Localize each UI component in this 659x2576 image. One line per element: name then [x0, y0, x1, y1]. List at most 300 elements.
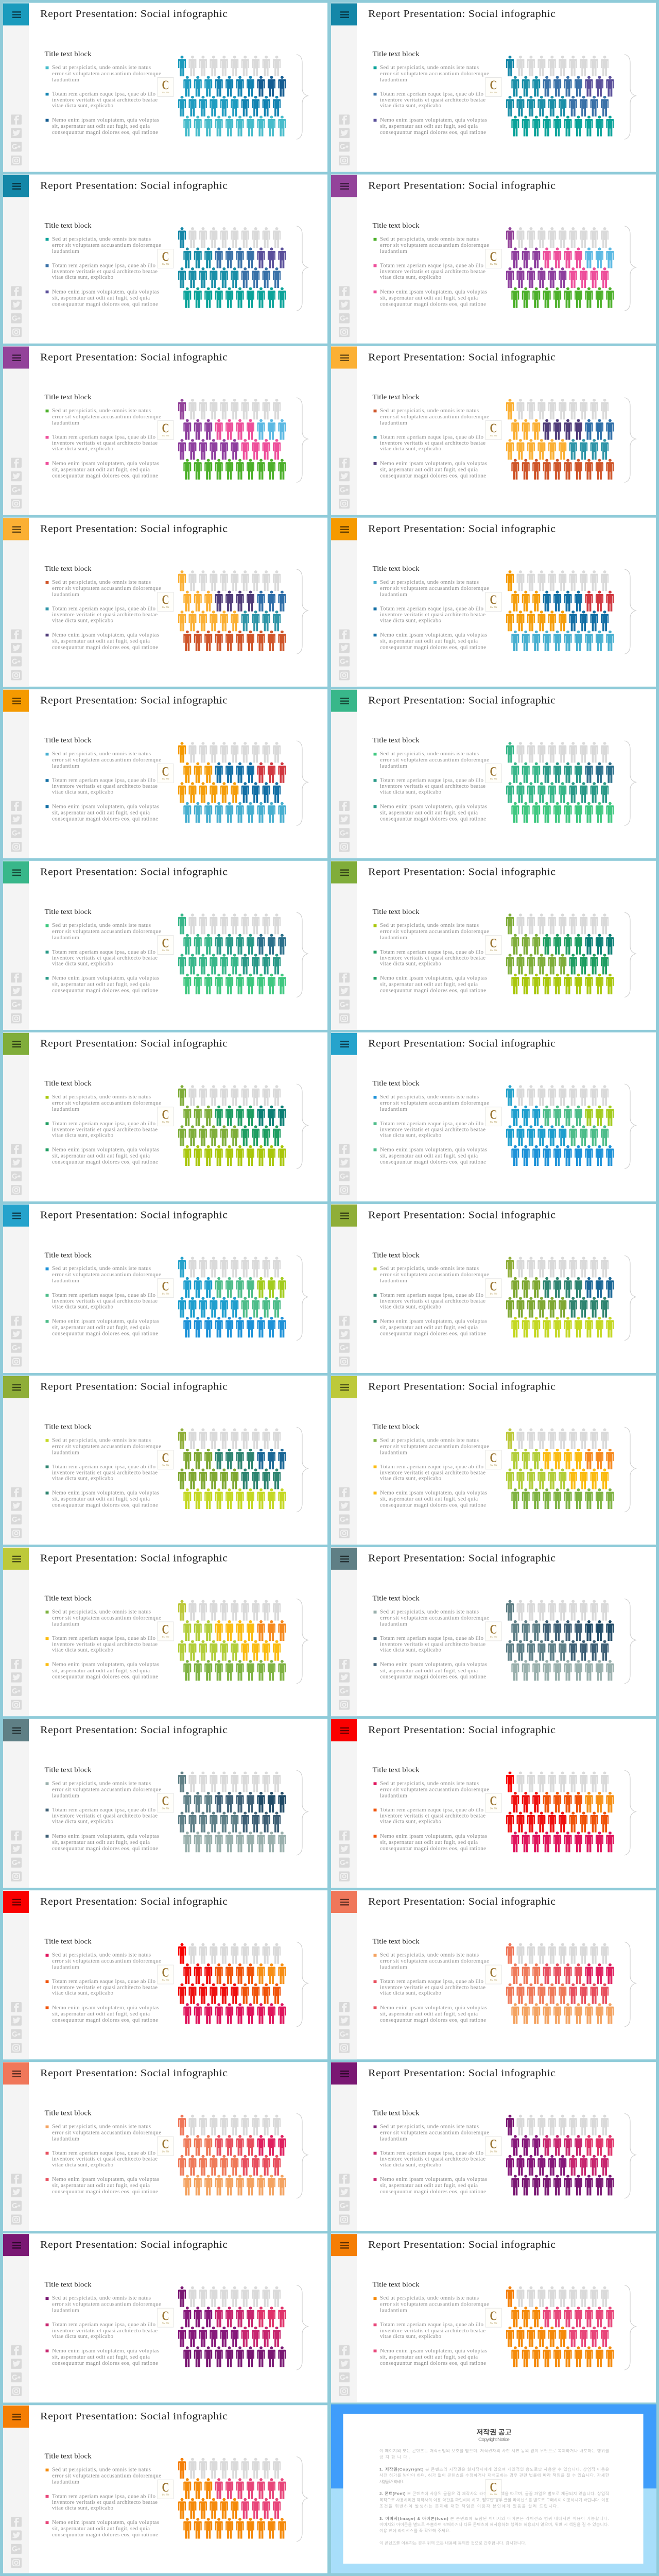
slide panel: row 6 left: [3, 861, 327, 1030]
sidebar: [331, 1032, 357, 1201]
text item 2: inventore veritatis et quasi architecto beatae: [380, 440, 485, 446]
text item 1: [374, 1781, 489, 1799]
block heading: Title text block: [44, 1080, 92, 1088]
text item 1: [374, 408, 489, 426]
text item 1: Sed ut perspiciatis, unde omnis iste natus: [52, 1094, 151, 1100]
social icons: [11, 1316, 22, 1367]
text item 3: consequuntur magni dolores eos, qui ratione: [380, 988, 486, 993]
slide panel: row 3 right: [331, 346, 656, 515]
social icons: [339, 1659, 350, 1710]
text item 3: sit, aspernatur aut odit aut fugit, sed quia: [380, 1154, 478, 1159]
text item 3: sit, aspernatur aut odit aut fugit, sed quia: [52, 2183, 150, 2189]
text item 1: error sit voluptatem accusantium doloremque: [380, 1959, 489, 1964]
text item 1: Sed ut perspiciatis, unde omnis iste natus: [52, 236, 151, 242]
text item 3: consequuntur magni dolores eos, qui ratione: [380, 2361, 486, 2366]
watermark: C: [490, 764, 497, 778]
people chart: [506, 1085, 614, 1166]
text item 3: consequuntur magni dolores eos, qui ratione: [380, 2018, 486, 2023]
card background: [331, 1547, 656, 1716]
text item 1: error sit voluptatem accusantium doloremque: [380, 1100, 489, 1106]
text item 2: vitae dicta sunt, explicabo: [52, 1819, 113, 1825]
notice closing line: 이 콘텐츠를 이용하는 경우 위의 모든 내용에 동의한 것으로 간주합니다. 감사합니다.: [379, 2540, 526, 2546]
block heading: Title text block: [372, 908, 420, 916]
watermark: [158, 2137, 174, 2156]
text item 3: consequuntur magni dolores eos, qui ratione: [52, 1846, 158, 1852]
text item 2: inventore veritatis et quasi architecto beatae: [52, 1299, 158, 1304]
title: Report Presentation: Social infographic: [40, 1895, 228, 1907]
text item 1: error sit voluptatem accusantium doloremque: [380, 71, 489, 77]
title: Report Presentation: Social infographic: [40, 694, 228, 706]
social icons: [339, 114, 350, 165]
text item 2: inventore veritatis et quasi architecto beatae: [52, 1642, 158, 1647]
text item 2: vitae dicta sunt, explicabo: [52, 275, 113, 280]
social icons: [339, 1831, 350, 1882]
text item 1: error sit voluptatem accusantium doloremque: [52, 414, 161, 420]
text item 2: vitae dicta sunt, explicabo: [52, 1133, 113, 1138]
social icons: [11, 2002, 22, 2053]
social icons: [339, 630, 350, 680]
text item 1: [45, 2467, 161, 2485]
menu button: [331, 2062, 357, 2084]
text item 3: [45, 1490, 159, 1509]
text item 3: [374, 1834, 487, 1852]
text item 1: Sed ut perspiciatis, unde omnis iste natus: [380, 1609, 479, 1615]
brace: [297, 741, 308, 826]
card background: [331, 2233, 656, 2402]
watermark: SM TN: [162, 1636, 169, 1638]
text item 2: [374, 263, 485, 280]
block heading: Title text block: [44, 737, 92, 744]
menu button: [331, 1205, 357, 1227]
brace: [297, 398, 308, 483]
watermark: [485, 2308, 501, 2327]
text item 1: laudantium: [52, 2137, 80, 2142]
text item 2: [45, 1293, 158, 1310]
text item 3: [374, 1147, 487, 1165]
text item 2: Totam rem aperiam eaque ipsa, quae ab illo: [380, 778, 483, 784]
notice paragraph 2: 사전 허가를 받아야 하며, 허가 없이 콘텐츠를 수정하거나 재배포하는 경우 관련 법률에 따라 책임을 질 수 있습니다. 자세한: [379, 2472, 609, 2478]
slide panel: row 2 right: [331, 175, 656, 344]
text item 3: Nemo enim ipsam voluptatem, quia voluptas: [52, 976, 159, 981]
menu button: [331, 518, 357, 540]
text item 1: Sed ut perspiciatis, unde omnis iste natus: [52, 1266, 151, 1272]
block heading: Title text block: [44, 2281, 92, 2289]
watermark: SM TN: [490, 2150, 497, 2153]
text item 3: sit, aspernatur aut odit aut fugit, sed quia: [52, 1325, 150, 1331]
watermark: C: [162, 935, 169, 950]
text item 2: Totam rem aperiam eaque ipsa, quae ab illo: [52, 435, 155, 440]
text item 3: [45, 633, 159, 650]
people chart: [506, 742, 614, 823]
people chart: [178, 56, 286, 137]
slide panel: row 12 right: [331, 1890, 656, 2059]
menu button: [3, 175, 29, 197]
text item 2: Totam rem aperiam eaque ipsa, quae ab illo: [380, 263, 483, 268]
text item 3: sit, aspernatur aut odit aut fugit, sed quia: [380, 1668, 478, 1674]
people chart: [506, 2286, 614, 2367]
people chart: [178, 570, 286, 651]
text item 3: [45, 461, 159, 479]
text item 3: [45, 2177, 159, 2195]
watermark: [158, 1278, 174, 1298]
slide panel: row 9 right: [331, 1376, 656, 1545]
notice paragraph 4: [379, 2516, 609, 2533]
watermark: SM TN: [490, 2322, 497, 2325]
text item 3: Nemo enim ipsam voluptatem, quia voluptas: [380, 1834, 487, 1839]
text item 1: [45, 1609, 161, 1627]
text item 2: Totam rem aperiam eaque ipsa, quae ab illo: [52, 1464, 155, 1470]
text item 2: [374, 1121, 485, 1138]
text item 3: [45, 118, 159, 135]
text item 1: error sit voluptatem accusantium doloremque: [380, 414, 489, 420]
text item 1: laudantium: [52, 1279, 80, 1284]
people chart: [178, 1428, 286, 1509]
card background: [3, 175, 327, 344]
text item 1: [374, 65, 489, 83]
text item 2: [45, 92, 158, 109]
people chart: [506, 56, 614, 137]
watermark: C: [490, 592, 497, 607]
people chart: [506, 913, 614, 994]
text item 1: error sit voluptatem accusantium doloremque: [52, 1787, 161, 1792]
text item 1: error sit voluptatem accusantium doloremque: [52, 929, 161, 935]
watermark: SM TN: [490, 1292, 497, 1295]
text item 1: [374, 1609, 489, 1627]
text item 3: consequuntur magni dolores eos, qui ratione: [380, 1331, 486, 1337]
sidebar: [331, 1890, 357, 2059]
text item 1: Sed ut perspiciatis, unde omnis iste natus: [380, 408, 479, 414]
watermark: C: [490, 1278, 497, 1293]
watermark: C: [490, 1622, 497, 1636]
text item 2: vitae dicta sunt, explicabo: [380, 447, 441, 452]
text item 2: [45, 778, 158, 795]
watermark: C: [162, 1965, 169, 1979]
text item 1: error sit voluptatem accusantium doloremque: [52, 243, 161, 248]
notice paragraph 2: 사항을 확인하세요.: [379, 2479, 404, 2484]
title: Report Presentation: Social infographic: [40, 1037, 228, 1049]
menu button: [3, 2405, 29, 2428]
text item 3: Nemo enim ipsam voluptatem, quia voluptas: [380, 461, 487, 466]
watermark: [485, 1450, 501, 1469]
sidebar: [3, 1204, 29, 1373]
text item 2: [374, 92, 485, 109]
text item 1: Sed ut perspiciatis, unde omnis iste natus: [380, 2296, 479, 2301]
notice subheading: Copyright Notice: [478, 2437, 510, 2443]
slide panel: row 14 left: [3, 2233, 327, 2402]
watermark: C: [162, 2137, 169, 2151]
social icons: [11, 801, 22, 852]
text item 3: [45, 1834, 159, 1852]
text item 2: vitae dicta sunt, explicabo: [52, 1648, 113, 1653]
block heading: Title text block: [44, 1251, 92, 1259]
text item 3: sit, aspernatur aut odit aut fugit, sed quia: [52, 982, 150, 987]
text item 3: sit, aspernatur aut odit aut fugit, sed quia: [380, 982, 478, 987]
sidebar: [3, 861, 29, 1030]
brace: [625, 226, 636, 311]
text item 2: [374, 435, 485, 452]
sidebar: [331, 2233, 357, 2402]
slide panel: row 15 left: [3, 2405, 327, 2573]
text item 1: error sit voluptatem accusantium doloremque: [380, 2130, 489, 2136]
text item 3: consequuntur magni dolores eos, qui ratione: [380, 473, 486, 479]
text item 3: Nemo enim ipsam voluptatem, quia voluptas: [52, 1147, 159, 1153]
text item 1: [45, 751, 161, 769]
sidebar: [3, 1376, 29, 1545]
text item 2: [45, 1979, 158, 1996]
text item 3: consequuntur magni dolores eos, qui ratione: [380, 302, 486, 307]
text item 2: inventore veritatis et quasi architecto beatae: [52, 2328, 158, 2334]
watermark: [158, 1793, 174, 1812]
watermark: [485, 1793, 501, 1812]
text item 2: [45, 1636, 158, 1653]
text item 1: [374, 751, 489, 769]
title: Report Presentation: Social infographic: [368, 1037, 556, 1049]
text item 1: Sed ut perspiciatis, unde omnis iste natus: [52, 1609, 151, 1615]
text item 2: vitae dicta sunt, explicabo: [380, 961, 441, 967]
text item 1: [45, 1094, 161, 1112]
menu button: [331, 3, 357, 25]
text item 3: consequuntur magni dolores eos, qui ratione: [380, 1160, 486, 1165]
watermark: [485, 1107, 501, 1126]
brace: [297, 912, 308, 997]
watermark: SM TN: [490, 1121, 497, 1123]
sidebar: [331, 1547, 357, 1716]
brace: [297, 1256, 308, 1341]
text item 2: Totam rem aperiam eaque ipsa, quae ab illo: [52, 1807, 155, 1813]
title: Report Presentation: Social infographic: [40, 351, 228, 363]
text item 1: error sit voluptatem accusantium doloremque: [52, 586, 161, 591]
brace: [297, 1942, 308, 2027]
text item 3: [374, 290, 487, 307]
text item 2: inventore veritatis et quasi architecto beatae: [52, 269, 158, 275]
people chart: [506, 1428, 614, 1509]
slide panel: row 2 left: [3, 175, 327, 344]
menu button: [3, 1548, 29, 1570]
brace: [625, 1256, 636, 1341]
text item 2: [374, 606, 485, 623]
text item 2: Totam rem aperiam eaque ipsa, quae ab illo: [52, 606, 155, 612]
title: Report Presentation: Social infographic: [368, 1380, 556, 1392]
text item 3: consequuntur magni dolores eos, qui ratione: [380, 130, 486, 135]
social icons: [339, 2002, 350, 2053]
text item 2: vitae dicta sunt, explicabo: [52, 961, 113, 967]
card background: [3, 1376, 327, 1545]
block heading: Title text block: [372, 737, 420, 744]
sidebar: [3, 1032, 29, 1201]
text item 1: laudantium: [380, 1279, 408, 1284]
social icons: [339, 1487, 350, 1538]
notice paragraph 2: 1. 저작권(Copyright) 본 콘텐츠의 저작권은 원저작자에게 있으며 개인적인 용도로만 사용할 수 있습니다. 상업적 이용은: [379, 2467, 609, 2472]
text item 2: [374, 1636, 485, 1653]
watermark: SM TN: [162, 263, 169, 265]
text item 1: [374, 236, 489, 255]
text item 1: Sed ut perspiciatis, unde omnis iste natus: [52, 2124, 151, 2129]
slide panel: row 6 right: [331, 861, 656, 1030]
notice heading: 저작권 공고: [476, 2429, 512, 2436]
watermark: C: [162, 2480, 169, 2495]
block heading: Title text block: [372, 1251, 420, 1259]
text item 3: [45, 2348, 159, 2366]
text item 1: laudantium: [52, 420, 80, 426]
text item 1: laudantium: [380, 1622, 408, 1627]
text item 2: Totam rem aperiam eaque ipsa, quae ab illo: [52, 1636, 155, 1641]
title: Report Presentation: Social infographic: [368, 179, 556, 191]
text item 3: Nemo enim ipsam voluptatem, quia voluptas: [52, 2348, 159, 2354]
card background: [3, 2233, 327, 2402]
watermark: SM TN: [162, 1464, 169, 1466]
text item 1: laudantium: [52, 935, 80, 941]
card background: [331, 518, 656, 687]
text item 3: sit, aspernatur aut odit aut fugit, sed quia: [52, 2354, 150, 2360]
text item 1: Sed ut perspiciatis, unde omnis iste natus: [380, 580, 479, 585]
text item 3: Nemo enim ipsam voluptatem, quia voluptas: [380, 1147, 487, 1153]
text item 3: [374, 1319, 487, 1337]
block heading: Title text block: [44, 1938, 92, 1945]
text item 3: consequuntur magni dolores eos, qui ratione: [52, 645, 158, 650]
text item 2: Totam rem aperiam eaque ipsa, quae ab illo: [52, 1121, 155, 1127]
card background: [331, 1719, 656, 1888]
sidebar: [3, 518, 29, 687]
text item 2: vitae dicta sunt, explicabo: [380, 1304, 441, 1310]
card background: [3, 3, 327, 172]
watermark: [485, 764, 501, 783]
title: Report Presentation: Social infographic: [40, 2410, 228, 2422]
sidebar: [3, 2062, 29, 2231]
card background: [331, 1204, 656, 1373]
brace: [297, 1427, 308, 1512]
watermark: C: [162, 420, 169, 435]
text item 2: vitae dicta sunt, explicabo: [380, 275, 441, 280]
text item 3: [374, 461, 487, 479]
text item 3: Nemo enim ipsam voluptatem, quia voluptas: [52, 118, 159, 123]
social icons: [339, 801, 350, 852]
text item 1: Sed ut perspiciatis, unde omnis iste natus: [380, 1953, 479, 1958]
text item 2: [374, 1979, 485, 1996]
people chart: [506, 570, 614, 651]
people chart: [506, 1943, 614, 2024]
text item 2: inventore veritatis et quasi architecto beatae: [380, 269, 485, 275]
text item 1: Sed ut perspiciatis, unde omnis iste natus: [380, 65, 479, 71]
sidebar: [3, 175, 29, 344]
text item 1: Sed ut perspiciatis, unde omnis iste natus: [380, 1781, 479, 1786]
text item 3: consequuntur magni dolores eos, qui ratione: [380, 1674, 486, 1680]
text item 1: error sit voluptatem accusantium doloremque: [380, 757, 489, 763]
watermark: C: [162, 1107, 169, 1122]
watermark: SM TN: [162, 1121, 169, 1123]
notice background: light blue band: [331, 2488, 656, 2573]
title: Report Presentation: Social infographic: [40, 2239, 228, 2250]
text item 1: error sit voluptatem accusantium doloremque: [52, 71, 161, 77]
title: Report Presentation: Social infographic: [368, 1209, 556, 1221]
text item 3: Nemo enim ipsam voluptatem, quia voluptas: [380, 804, 487, 809]
card background: [3, 346, 327, 515]
brace: [625, 1770, 636, 1855]
text item 2: inventore veritatis et quasi architecto beatae: [380, 613, 485, 618]
watermark: [158, 2480, 174, 2499]
text item 2: vitae dicta sunt, explicabo: [380, 103, 441, 109]
text item 1: Sed ut perspiciatis, unde omnis iste natus: [380, 1094, 479, 1100]
text item 1: [374, 580, 489, 598]
text item 3: sit, aspernatur aut odit aut fugit, sed quia: [380, 296, 478, 301]
people chart: [178, 2286, 286, 2367]
watermark: SM TN: [162, 777, 169, 780]
text item 2: inventore veritatis et quasi architecto beatae: [380, 2157, 485, 2162]
text item 3: Nemo enim ipsam voluptatem, quia voluptas: [380, 2348, 487, 2354]
text item 2: inventore veritatis et quasi architecto beatae: [380, 97, 485, 103]
title: Report Presentation: Social infographic: [368, 1895, 556, 1907]
text item 3: sit, aspernatur aut odit aut fugit, sed quia: [380, 2354, 478, 2360]
sidebar: [3, 3, 29, 172]
text item 2: inventore veritatis et quasi architecto beatae: [380, 784, 485, 789]
people chart: [506, 1257, 614, 1337]
menu button: [331, 861, 357, 884]
watermark: [485, 420, 501, 439]
text item 2: Totam rem aperiam eaque ipsa, quae ab illo: [380, 1464, 483, 1470]
card background: [3, 689, 327, 858]
text item 2: vitae dicta sunt, explicabo: [52, 790, 113, 795]
people chart: [506, 1772, 614, 1852]
text item 1: error sit voluptatem accusantium doloremque: [52, 1616, 161, 1621]
text item 3: Nemo enim ipsam voluptatem, quia voluptas: [380, 1319, 487, 1325]
watermark: [485, 1622, 501, 1641]
text item 1: error sit voluptatem accusantium doloremque: [52, 1444, 161, 1449]
slide panel: row 10 right: [331, 1547, 656, 1716]
watermark: SM TN: [490, 91, 497, 94]
menu button: [3, 1891, 29, 1913]
text item 2: Totam rem aperiam eaque ipsa, quae ab illo: [380, 1979, 483, 1985]
title: Report Presentation: Social infographic: [368, 2239, 556, 2250]
text item 2: [374, 1807, 485, 1825]
text item 3: consequuntur magni dolores eos, qui ratione: [380, 2189, 486, 2195]
menu button: [331, 1376, 357, 1398]
text item 2: inventore veritatis et quasi architecto beatae: [52, 956, 158, 961]
title: Report Presentation: Social infographic: [368, 2067, 556, 2079]
text item 1: Sed ut perspiciatis, unde omnis iste natus: [380, 923, 479, 928]
text item 2: Totam rem aperiam eaque ipsa, quae ab illo: [52, 2150, 155, 2156]
watermark: SM TN: [490, 1979, 497, 1981]
text item 1: laudantium: [380, 2308, 408, 2313]
watermark: [158, 1965, 174, 1984]
text item 3: Nemo enim ipsam voluptatem, quia voluptas: [380, 2177, 487, 2182]
text item 2: inventore veritatis et quasi architecto beatae: [52, 97, 158, 103]
text item 2: vitae dicta sunt, explicabo: [380, 1819, 441, 1825]
text item 2: Totam rem aperiam eaque ipsa, quae ab illo: [52, 2494, 155, 2499]
watermark: [485, 2137, 501, 2156]
social icons: [11, 973, 22, 1023]
text item 2: Totam rem aperiam eaque ipsa, quae ab illo: [380, 950, 483, 955]
text item 2: vitae dicta sunt, explicabo: [52, 2505, 113, 2511]
text item 1: laudantium: [380, 592, 408, 598]
text item 1: Sed ut perspiciatis, unde omnis iste natus: [52, 1953, 151, 1958]
text item 1: laudantium: [52, 77, 80, 83]
brace: [625, 912, 636, 997]
watermark: [158, 249, 174, 268]
text item 1: Sed ut perspiciatis, unde omnis iste natus: [52, 2296, 151, 2301]
card background: [3, 1890, 327, 2059]
social icons: [339, 458, 350, 509]
people chart: [178, 1257, 286, 1337]
slide panel: row 7 right: [331, 1032, 656, 1201]
text item 1: Sed ut perspiciatis, unde omnis iste natus: [380, 236, 479, 242]
menu button: [331, 1548, 357, 1570]
text item 2: inventore veritatis et quasi architecto beatae: [380, 1814, 485, 1819]
brace: [625, 569, 636, 654]
text item 2: vitae dicta sunt, explicabo: [380, 1476, 441, 1481]
text item 1: laudantium: [52, 1965, 80, 1970]
block heading: Title text block: [372, 393, 420, 401]
text item 2: vitae dicta sunt, explicabo: [52, 618, 113, 623]
notice paragraph 3: [379, 2491, 609, 2509]
